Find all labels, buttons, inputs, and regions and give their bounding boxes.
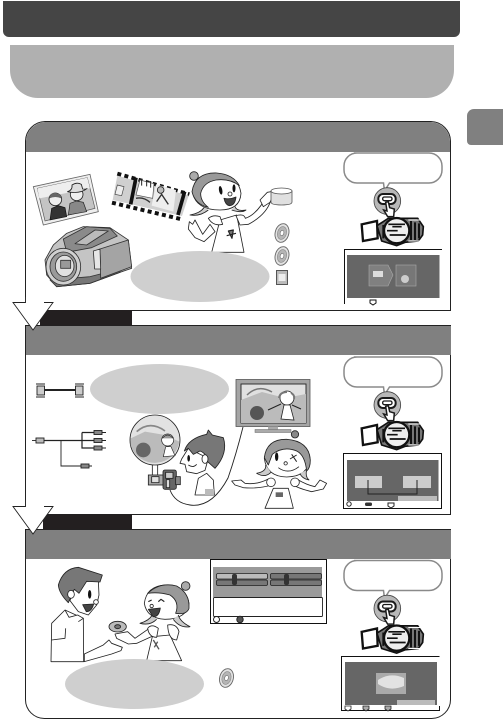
icon: disc [217, 667, 236, 689]
caption ellipse [90, 364, 229, 414]
step label tab 2 [43, 514, 132, 530]
camcorder [45, 227, 132, 287]
icon: disc [273, 222, 291, 244]
screen preview [344, 250, 442, 305]
HDMI cable [36, 384, 84, 397]
girl with open arms [232, 431, 327, 508]
menu screen [210, 560, 326, 624]
title bar [3, 1, 460, 37]
callout and button [344, 153, 442, 246]
film strip [112, 172, 190, 220]
screen preview [344, 454, 442, 508]
connecting cable [170, 427, 243, 505]
photo of two people [33, 174, 98, 225]
arrow 1 [13, 297, 53, 330]
man with open hand [51, 567, 122, 662]
subtitle band [10, 45, 454, 98]
caption ellipse [65, 659, 204, 709]
callout and button [344, 560, 442, 653]
boy holding camera [180, 430, 225, 495]
caption ellipse [130, 251, 270, 302]
icon: memory card [276, 270, 288, 284]
small camcorder [148, 470, 180, 489]
panel: step 1 [26, 122, 450, 310]
step 3 header [26, 530, 451, 559]
hard disk drive [271, 188, 292, 205]
step 2 header [26, 326, 451, 355]
icon: disc [273, 245, 291, 267]
AV cable [32, 430, 106, 468]
panel: step 2 [26, 326, 451, 514]
callout and button [344, 357, 442, 450]
camera view bubble [130, 415, 180, 477]
arrow 2 [13, 500, 53, 534]
girl holding disc [109, 582, 190, 661]
television [236, 380, 310, 432]
screen preview [342, 656, 440, 711]
section tab [467, 109, 503, 145]
panel: step 3 [25, 530, 451, 719]
step 1 header [26, 122, 450, 152]
girl pointing [188, 172, 275, 252]
step label tab 1 [40, 310, 132, 326]
